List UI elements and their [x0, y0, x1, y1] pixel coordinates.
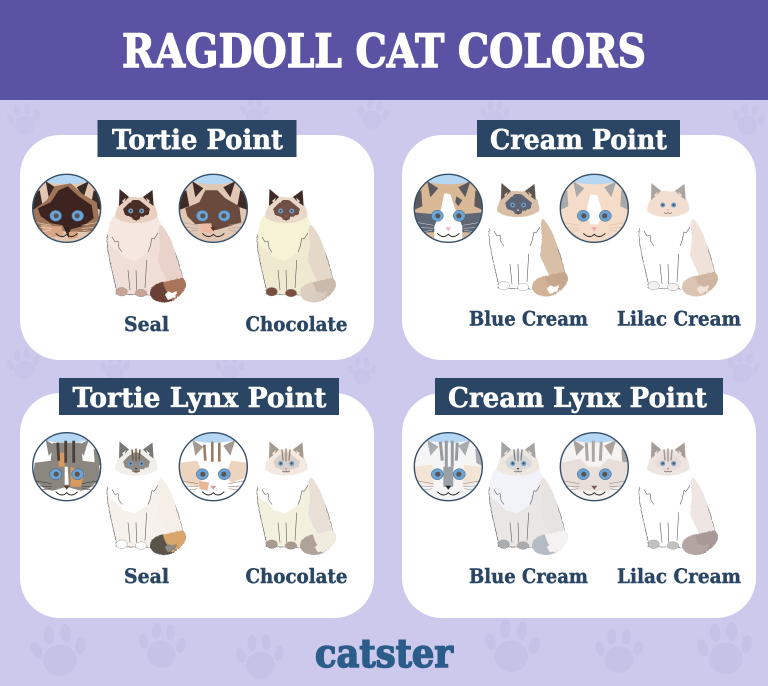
face: cream lynx lilac: [559, 427, 629, 502]
cat: cream lynx blue: [489, 442, 568, 555]
label: Chocolate: Chocolate: [246, 565, 348, 588]
cat: blue cream: [489, 183, 568, 297]
label: Seal: Seal: [124, 313, 169, 336]
cat: tortie seal: [107, 189, 186, 303]
face: tortie seal: [32, 168, 102, 243]
panel: Tortie Point: [20, 120, 374, 360]
label: Blue Cream: Blue Cream: [469, 308, 588, 330]
label: Lilac Cream: Lilac Cream: [617, 565, 741, 588]
face: cream lynx blue: [413, 427, 483, 502]
cat: tortie chocolate: [257, 189, 336, 303]
heading: Cream Point: Cream Point: [490, 125, 667, 156]
header band: [0, 0, 768, 100]
face: tortie lynx chocolate: [178, 427, 248, 502]
face: lilac cream: [559, 168, 629, 243]
cat: tortie lynx seal: [107, 442, 186, 555]
cat: cream lynx lilac: [639, 442, 718, 555]
face: blue cream: [413, 168, 483, 243]
panel: Cream Lynx Point: [402, 378, 756, 618]
logo: catster: catster: [315, 631, 453, 677]
panel: Cream Point: [402, 120, 756, 360]
cat: tortie lynx chocolate: [257, 442, 336, 555]
title: RAGDOLL CAT COLORS: [122, 24, 646, 78]
cat: lilac cream: [639, 183, 718, 297]
label: Seal: Seal: [124, 565, 169, 588]
background paw prints: bottom row: [27, 618, 756, 680]
heading: Cream Lynx Point: Cream Lynx Point: [448, 383, 708, 414]
heading: Tortie Point: Tortie Point: [112, 125, 284, 156]
background paw prints: upper rows: [4, 97, 768, 385]
label: Blue Cream: Blue Cream: [469, 565, 588, 588]
panel: Tortie Lynx Point: [20, 378, 374, 618]
label: Chocolate: Chocolate: [246, 313, 348, 336]
face: tortie chocolate: [178, 168, 248, 243]
face: tortie lynx seal: [32, 427, 102, 502]
label: Lilac Cream: Lilac Cream: [617, 308, 741, 330]
heading: Tortie Lynx Point: Tortie Lynx Point: [72, 383, 327, 414]
